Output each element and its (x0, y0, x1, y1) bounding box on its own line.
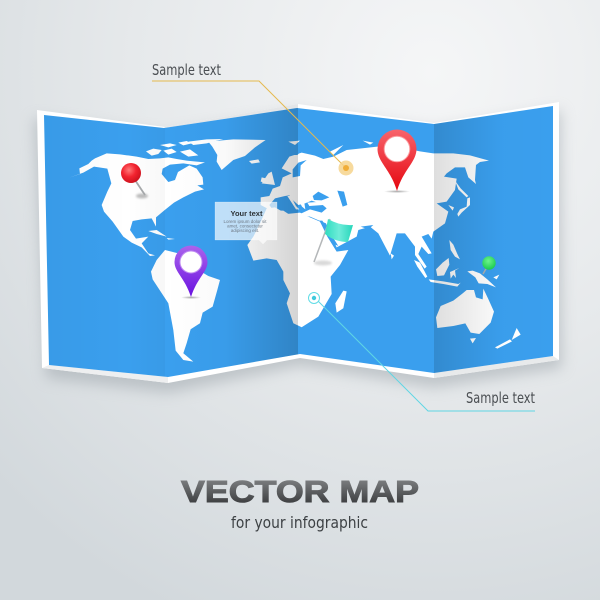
South America (151, 250, 220, 362)
top label: Sample text (152, 61, 221, 79)
world map continents (69, 139, 521, 362)
Red Sea (319, 221, 338, 246)
callout body: adipiscing elit. (231, 228, 259, 233)
pin: large red location marker (378, 130, 416, 193)
pin: green push pin (482, 256, 496, 274)
North America (69, 139, 223, 256)
Australia (436, 289, 494, 343)
marker: teal target (308, 292, 320, 304)
fold shading (232, 108, 490, 373)
callout: your text (215, 202, 277, 244)
title: VECTOR MAP (181, 474, 419, 509)
yellow leader line (152, 81, 345, 167)
Italy and Greece (287, 196, 323, 209)
callout heading: Your text (231, 209, 263, 218)
teal leader line (314, 297, 535, 411)
bottom label: Sample text (466, 389, 535, 407)
pin: red push pin (121, 163, 148, 198)
subtitle: for your infographic (231, 513, 368, 532)
Greenland and Iceland (208, 139, 266, 170)
Southeast Asia and Oceania islands (414, 240, 499, 287)
seas cut into Eurasia (269, 149, 373, 229)
callout body: amet, consectetur (227, 224, 263, 228)
Africa (247, 207, 348, 327)
callout body: Lorem ipsum dolor sit (223, 219, 267, 224)
marker: orange target (338, 160, 354, 176)
New Zealand (495, 328, 521, 349)
map sheet (34, 100, 562, 393)
Eurasia (261, 141, 489, 269)
flag marker (314, 219, 353, 266)
pin: purple location marker (174, 246, 208, 299)
